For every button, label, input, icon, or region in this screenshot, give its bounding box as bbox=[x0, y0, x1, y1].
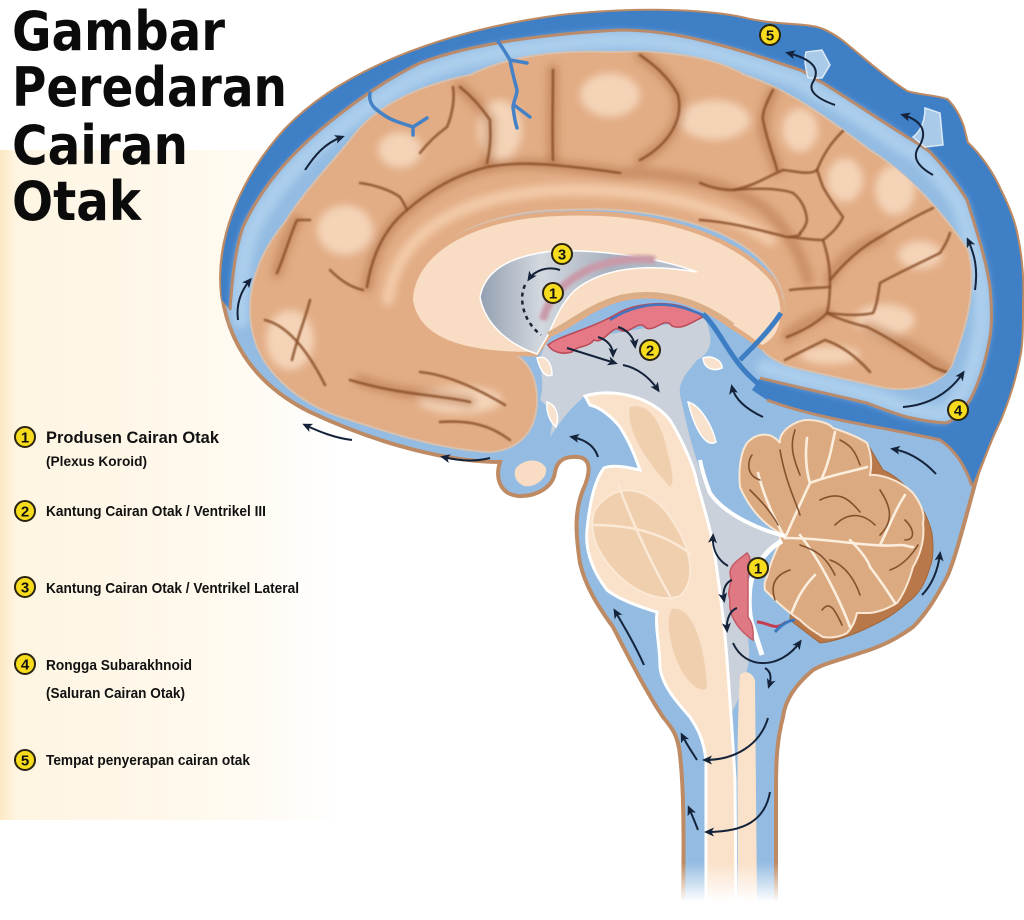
midbrain nucleus bbox=[629, 406, 673, 487]
legend item 5: 5 bbox=[21, 752, 29, 770]
choroid plexus of lateral ventricle bbox=[543, 259, 655, 320]
legend item 2 bbox=[15, 501, 266, 521]
superior sagittal veins bbox=[370, 40, 530, 135]
legend item 4 bbox=[15, 654, 192, 702]
title: Gambar bbox=[12, 0, 225, 63]
figure callouts: 3 bbox=[558, 246, 566, 264]
title: Peredaran bbox=[12, 56, 287, 119]
lower choroid plexus bbox=[729, 553, 753, 640]
illustration: brain cross-section bbox=[221, 11, 1022, 905]
legend item 4: 4 bbox=[21, 656, 30, 674]
tan arch above the third ventricle bbox=[548, 294, 733, 334]
title: Otak bbox=[12, 170, 142, 233]
figure callouts: 2 bbox=[646, 342, 654, 360]
third ventricle and aqueduct bbox=[540, 318, 785, 720]
legend item 4: Rongga Subarakhnoid bbox=[46, 657, 192, 674]
third ventricle choroid plexus bbox=[548, 304, 703, 353]
legend item 4: (Saluran Cairan Otak) bbox=[46, 685, 185, 702]
legend item 1: Produsen Cairan Otak bbox=[46, 428, 220, 447]
cerebellum bbox=[739, 420, 924, 638]
arachnoid granulation pockets bbox=[805, 50, 943, 147]
cerebrum folds bbox=[265, 55, 950, 440]
legend item 1 bbox=[15, 427, 220, 469]
cerebellar arbor vitae bbox=[749, 430, 918, 627]
title bbox=[12, 0, 287, 233]
plexus vessels bbox=[757, 622, 786, 626]
spinal cord fade-out bbox=[670, 862, 790, 912]
legend item 5 bbox=[15, 750, 251, 770]
arachnoid lining bbox=[230, 30, 992, 423]
pons divider bbox=[592, 484, 692, 600]
tentorium lower line bbox=[767, 400, 972, 486]
white velum below the cerebellum bbox=[749, 541, 782, 655]
cerebellum outer rim bbox=[790, 443, 933, 643]
lower spinal cord column bbox=[738, 672, 757, 905]
legend item 1: 1 bbox=[21, 430, 29, 446]
light blue band around cerebrum bbox=[240, 40, 982, 414]
brain stem and spinal cord bbox=[585, 393, 736, 905]
great cerebral vein bbox=[703, 313, 781, 385]
cerebrum bbox=[250, 52, 972, 452]
figure callouts: 1 bbox=[549, 286, 557, 302]
figure callouts: 1 bbox=[754, 560, 762, 578]
figure callouts bbox=[543, 25, 968, 578]
dark blue venous sinus and tentorium bbox=[221, 11, 1022, 486]
legend item 3: 3 bbox=[21, 580, 29, 596]
figure callouts: 4 bbox=[954, 402, 963, 420]
outer meninges and cerebrospinal fluid bbox=[221, 11, 1022, 905]
legend item 2: 2 bbox=[21, 504, 29, 520]
CSF flow arrows bbox=[238, 53, 976, 832]
legend item 5: Tempat penyerapan cairan otak bbox=[46, 752, 251, 769]
legend item 3: Kantung Cairan Otak / Ventrikel Lateral bbox=[46, 580, 299, 597]
lateral ventricle bbox=[480, 251, 697, 354]
figure callouts: 5 bbox=[766, 28, 774, 44]
legend item 2: Kantung Cairan Otak / Ventrikel III bbox=[46, 503, 266, 520]
panel: cream legend background bbox=[0, 150, 345, 820]
legend item 1: (Plexus Koroid) bbox=[46, 454, 147, 469]
white border of aqueduct and fourth ventricle bbox=[700, 460, 785, 536]
legend bbox=[15, 427, 299, 770]
title: Cairan bbox=[12, 114, 188, 177]
corpus callosum bbox=[413, 216, 780, 352]
pons nucleus bbox=[592, 490, 690, 598]
hypophysis bbox=[515, 460, 546, 486]
medulla nucleus bbox=[669, 609, 707, 690]
pale tissue pieces around the ventricle bbox=[537, 357, 722, 443]
plexus blood vessel bbox=[610, 305, 708, 320]
